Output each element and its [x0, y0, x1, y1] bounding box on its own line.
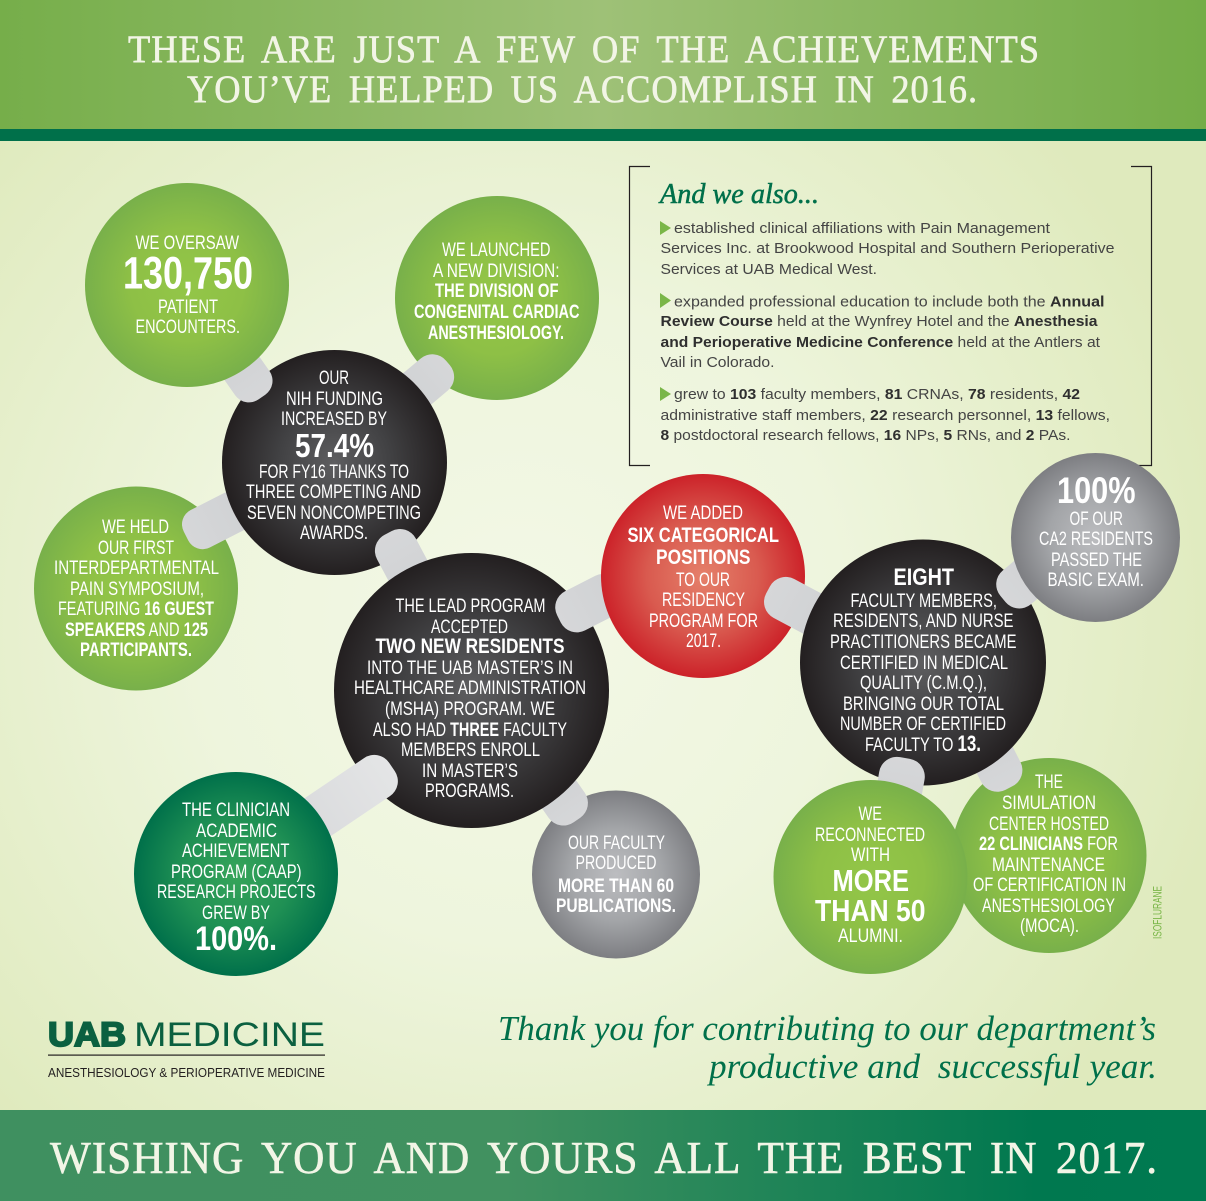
bubble: CA2 residents	[1011, 453, 1180, 622]
bubble: research projects: ACHIEVEMENT	[182, 841, 290, 862]
header band: YOU’VE HELPED US ACCOMPLISH IN 2016.	[187, 68, 978, 111]
bubble: lead program: PROGRAMS.	[425, 781, 514, 802]
bubble: NIH funding: 57.4%	[295, 427, 374, 464]
bubble: new division: THE DIVISION OF	[435, 281, 558, 302]
connector: patient encounters to NIH	[210, 336, 279, 409]
bubble: lead program: INTO THE UAB MASTER’S IN	[367, 658, 573, 679]
bubble: lead program: IN MASTER’S	[422, 761, 518, 782]
bubble: NIH funding: INCREASED BY	[281, 409, 387, 430]
bubble: residency positions	[601, 474, 805, 678]
bubble: residency positions: 2017.	[686, 631, 721, 652]
panel: and we also: 8 postdoctoral research fellows, 16 NPs, 5 RNs, and 2 PAs.	[660, 428, 1070, 444]
connector: NIH to pain symposium	[176, 486, 258, 555]
bubble: eight faculty: FACULTY TO 13.	[865, 731, 981, 756]
bubble: pain symposium: INTERDEPARTMENTAL	[54, 558, 219, 579]
panel: and we also: grew to 103 faculty members, 81 CRNAs, 78 residents, 42	[674, 387, 1080, 403]
connector: residency positions to eight faculty	[758, 571, 840, 642]
panel: and we also: Services at UAB Medical West.	[660, 262, 877, 278]
footer band: WISHING YOU AND YOURS ALL THE BEST IN 2017.	[50, 1132, 1158, 1183]
bubble: new division: ANESTHESIOLOGY.	[428, 323, 564, 344]
bubble: new division: A NEW DIVISION:	[433, 261, 560, 282]
bubble: simulation center: 22 CLINICIANS FOR	[979, 834, 1118, 855]
bubble: patient encounters: PATIENT	[158, 297, 218, 318]
bubble: simulation center: SIMULATION	[1002, 793, 1096, 814]
bubble: patient encounters: 130,750	[123, 248, 253, 298]
bubble: CA2 residents: PASSED THE	[1051, 550, 1142, 571]
bubble: publications: PRODUCED	[576, 853, 656, 874]
bubble: eight faculty: BRINGING OUR TOTAL	[843, 694, 1004, 715]
bubble: eight faculty	[800, 540, 1046, 786]
bubble: publications: OUR FACULTY	[568, 833, 665, 854]
bubble: NIH funding: NIH FUNDING	[286, 389, 383, 410]
bubble: publications: MORE THAN 60	[558, 876, 674, 897]
bubble: simulation center: (MOCA).	[1020, 916, 1079, 937]
bubble: residency positions: TO OUR	[676, 570, 730, 591]
thank you message	[498, 1009, 1157, 1086]
connector: eight faculty to CA2 residents	[989, 544, 1063, 616]
bubble: pain symposium: FEATURING 16 GUEST	[58, 599, 214, 620]
bubble: simulation center	[952, 758, 1146, 953]
bubble: NIH funding: THREE COMPETING AND	[246, 482, 421, 503]
bubble: eight faculty: NUMBER OF CERTIFIED	[840, 714, 1006, 735]
bubble: NIH funding: FOR FY16 THANKS TO	[259, 462, 409, 483]
bubble: pain symposium: OUR FIRST	[98, 538, 174, 559]
panel: and we also: Review Course held at the Wynfrey Hotel and the Anesthesia	[660, 314, 1098, 330]
panel: and we also: And we also...	[658, 179, 819, 210]
bubble: patient encounters	[85, 183, 289, 387]
logo: UAB Medicine: MEDICINE	[134, 1016, 325, 1054]
panel: and we also	[630, 166, 1152, 466]
connector: NIH to new division	[389, 347, 461, 418]
bubble: residency positions: WE ADDED	[663, 503, 743, 524]
bubble: eight faculty: EIGHT	[894, 564, 954, 591]
bubble: simulation center: MAINTENANCE	[992, 855, 1105, 876]
bubble: alumni: WITH	[851, 845, 890, 866]
bubble: lead program: HEALTHCARE ADMINISTRATION	[354, 678, 586, 699]
bubble: lead program: MEMBERS ENROLL	[401, 740, 540, 761]
bubble: patient encounters: ENCOUNTERS.	[136, 317, 240, 338]
logo: UAB Medicine: UAB	[48, 1016, 126, 1054]
bubble: alumni: MORE	[832, 863, 909, 898]
bubble: new division: CONGENITAL CARDIAC	[414, 302, 580, 323]
bubble: publications	[532, 790, 700, 958]
bubble: NIH funding	[222, 350, 447, 575]
bubble: CA2 residents: BASIC EXAM.	[1048, 570, 1144, 591]
bubble: CA2 residents: 100%	[1057, 470, 1136, 511]
connector: lead program to residency positions	[549, 568, 631, 639]
connector: lead program to publications	[530, 766, 595, 833]
bubble: publications: PUBLICATIONS.	[556, 896, 676, 917]
bubble: lead program: THE LEAD PROGRAM	[396, 596, 546, 617]
bubble: eight faculty: PRACTITIONERS BECAME	[830, 632, 1016, 653]
bubble: lead program: TWO NEW RESIDENTS	[376, 635, 564, 658]
bubble: NIH funding: OUR	[319, 368, 349, 389]
bubble: simulation center: CENTER HOSTED	[989, 814, 1109, 835]
bubble: eight faculty: FACULTY MEMBERS,	[850, 591, 997, 612]
header band: THESE ARE JUST A FEW OF THE ACHIEVEMENTS	[128, 28, 1040, 71]
connector: lead program to research projects	[280, 748, 405, 853]
bubble: research projects: THE CLINICIAN	[182, 800, 290, 821]
bubble: simulation center: OF CERTIFICATION IN	[973, 875, 1126, 896]
bubble: alumni: ALUMNI.	[838, 926, 903, 947]
bubble: lead program	[334, 553, 609, 828]
bubble: residency positions: POSITIONS	[656, 546, 750, 569]
bubble: new division: WE LAUNCHED	[442, 240, 550, 261]
bubble: alumni: WE	[858, 804, 882, 825]
side credit: isoflurane: ISOFLURANE	[1152, 886, 1164, 939]
bubble: lead program: (MSHA) PROGRAM. WE	[385, 699, 555, 720]
bubble: alumni	[774, 780, 968, 974]
bubble: research projects	[134, 772, 338, 976]
connector: NIH to lead program	[369, 523, 443, 610]
bubble: lead program: ALSO HAD THREE FACULTY	[373, 720, 567, 741]
header band	[0, 0, 1206, 141]
bubble: research projects: GREW BY	[202, 903, 270, 924]
panel: and we also: established clinical affiliations with Pain Management	[674, 221, 1050, 237]
panel: and we also: Vail in Colorado.	[660, 355, 774, 371]
bubble: CA2 residents: OF OUR	[1070, 509, 1123, 530]
bubble: research projects: PROGRAM (CAAP)	[171, 862, 302, 883]
bubble: residency positions: RESIDENCY	[662, 590, 745, 611]
bubble: eight faculty: RESIDENTS, AND NURSE	[833, 611, 1014, 632]
connector: eight faculty to simulation center	[962, 725, 1029, 798]
bubble: new division	[395, 196, 599, 400]
bubble: pain symposium	[34, 486, 238, 690]
bubble: alumni: THAN 50	[815, 893, 926, 928]
bubble: pain symposium: WE HELD	[102, 517, 169, 538]
connector: eight faculty to alumni	[872, 754, 928, 821]
bubble: pain symposium: PARTICIPANTS.	[80, 640, 192, 661]
bubble: research projects: 100%.	[195, 920, 277, 958]
logo: UAB Medicine	[48, 1016, 325, 1080]
bubble: lead program: ACCEPTED	[431, 617, 508, 638]
bubble: alumni: RECONNECTED	[815, 825, 925, 846]
bubble: pain symposium: PAIN SYMPOSIUM,	[70, 579, 204, 600]
bubble: NIH funding: AWARDS.	[300, 523, 368, 544]
bubble: residency positions: PROGRAM FOR	[649, 611, 758, 632]
bubble: pain symposium: SPEAKERS AND 125	[65, 620, 208, 641]
bubble: eight faculty: CERTIFIED IN MEDICAL	[840, 653, 1008, 674]
thank you message: Thank you for contributing to our department’s	[498, 1009, 1156, 1048]
bubble: simulation center: ANESTHESIOLOGY	[982, 896, 1115, 917]
logo: UAB Medicine: ANESTHESIOLOGY & PERIOPERATIVE MEDICINE	[48, 1066, 325, 1080]
panel: and we also: Services Inc. at Brookwood Hospital and Southern Perioperative	[660, 241, 1114, 257]
panel: and we also: expanded professional education to include both the Annual	[674, 294, 1104, 310]
thank you message: productive and successful year.	[706, 1047, 1157, 1086]
bubble: eight faculty: QUALITY (C.M.Q.),	[860, 673, 987, 694]
footer band	[0, 1110, 1206, 1201]
bubble: CA2 residents: CA2 RESIDENTS	[1039, 529, 1153, 550]
bubble: simulation center: THE	[1035, 772, 1063, 793]
panel: and we also: and Perioperative Medicine Conference held at the Antlers at	[660, 335, 1100, 351]
bubble: NIH funding: SEVEN NONCOMPETING	[247, 503, 421, 524]
bubble: research projects: ACADEMIC	[196, 821, 277, 842]
bubble: residency positions: SIX CATEGORICAL	[628, 524, 779, 547]
bubble: research projects: RESEARCH PROJECTS	[157, 882, 316, 903]
bubble: patient encounters: WE OVERSAW	[136, 233, 239, 254]
panel: and we also: administrative staff members, 22 research personnel, 13 fellows,	[660, 408, 1110, 424]
